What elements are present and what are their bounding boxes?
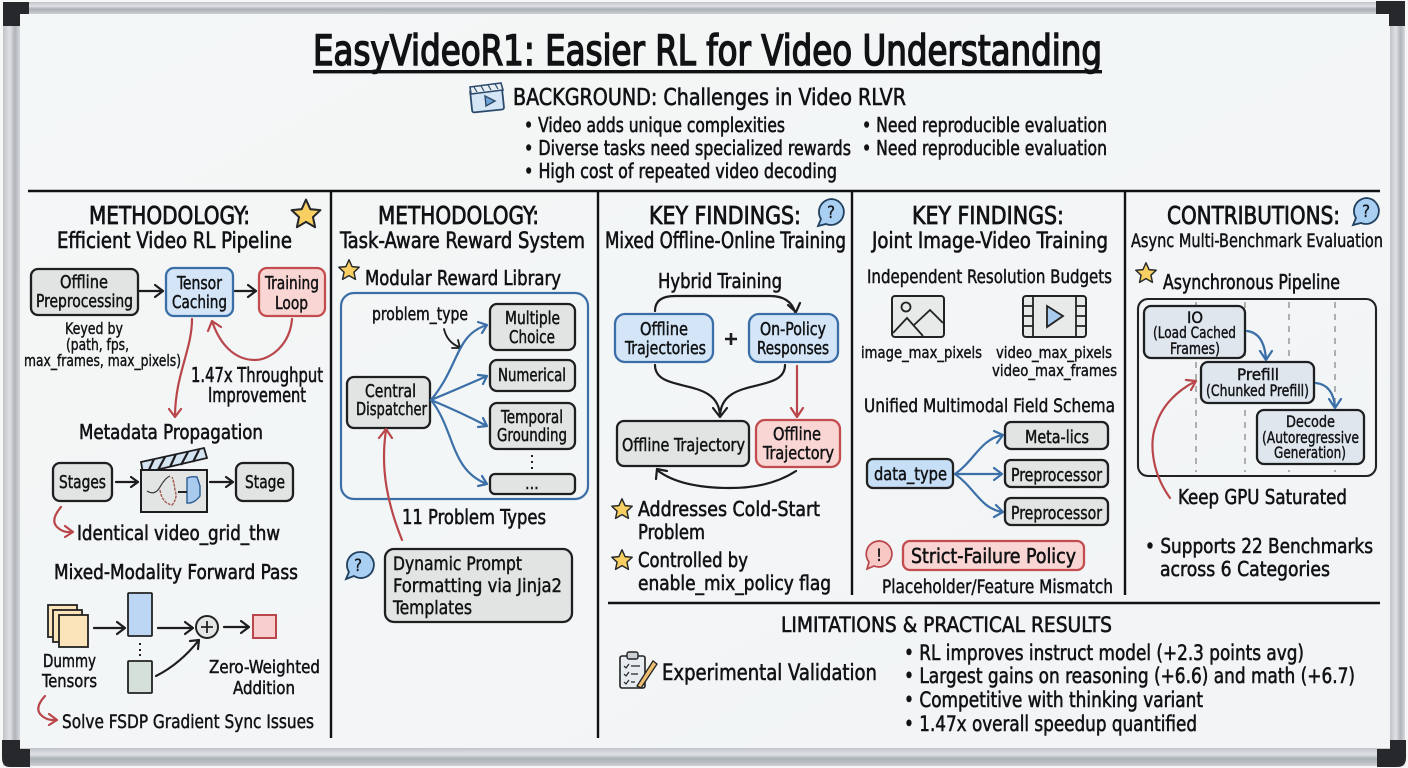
arrow: caching to loop — [235, 285, 256, 297]
numerical box — [490, 360, 575, 391]
arrow: return — [656, 469, 796, 488]
caching key note: (path, fps, — [66, 335, 129, 354]
training loop box — [259, 268, 325, 316]
arrow: red down — [791, 366, 803, 417]
arrow: caching to metadata — [169, 319, 192, 417]
arrow: prefill to decode — [1316, 383, 1341, 408]
hybrid training label: Hybrid Training — [658, 269, 782, 293]
panel: mixed offline-online training — [605, 199, 846, 595]
preprocessor box — [1005, 460, 1108, 487]
on-policy responses box: On-Policy — [760, 320, 826, 340]
heading: KEY FINDINGS: — [649, 201, 801, 230]
video budget label: video_max_frames — [992, 361, 1117, 381]
IO box: Frames) — [1170, 339, 1220, 358]
dispatcher box — [347, 377, 430, 428]
heading: KEY FINDINGS: — [912, 201, 1064, 230]
dummy tensors label: Dummy — [43, 652, 96, 672]
training loop box: Loop — [275, 294, 308, 314]
tensor caching box: Tensor — [176, 274, 222, 294]
icon: question bubble: ? — [1362, 202, 1370, 222]
stage box — [236, 463, 293, 501]
offline trajectory grey box — [617, 421, 749, 466]
icon: image — [892, 296, 944, 337]
validation label: Experimental Validation — [662, 661, 877, 686]
background bullets: • Need reproducible evaluation — [862, 113, 1107, 137]
arrow: hook — [54, 507, 73, 537]
panel: methodology pipeline — [24, 200, 325, 733]
temporal grounding box — [490, 403, 575, 449]
benchmark bullets: • Supports 22 Benchmarks — [1145, 534, 1373, 558]
prefill box: (Chunked Prefill) — [1206, 381, 1309, 400]
icon: addition node — [196, 616, 218, 638]
saturated label: Keep GPU Saturated — [1178, 485, 1347, 509]
heading: CONTRIBUTIONS: — [1167, 201, 1340, 230]
panel: async evaluation — [1131, 198, 1383, 581]
arrow: problem type — [444, 329, 460, 348]
caching key note — [24, 319, 181, 371]
panel: background — [470, 83, 1107, 183]
icon: question bubble: ? — [354, 556, 362, 576]
IO box: IO — [1187, 308, 1203, 327]
meta-lics box — [1005, 422, 1108, 449]
decode box: Generation) — [1274, 443, 1346, 462]
prompt formatting box — [385, 549, 572, 622]
zero weighted label: Addition — [233, 679, 295, 699]
identical grid note: Identical video_grid_thw — [77, 521, 280, 545]
subheading: Joint Image-Video Training — [870, 229, 1108, 254]
data type box — [867, 459, 953, 488]
pipeline heading: Asynchronous Pipeline — [1163, 270, 1340, 294]
background bullets — [524, 113, 1107, 183]
dispatcher box: Dispatcher — [356, 400, 427, 420]
library heading: Modular Reward Library — [365, 266, 561, 290]
preprocessor box: Preprocessor — [1011, 466, 1102, 486]
arrow: tensors to blocks — [94, 622, 125, 634]
decode box — [1257, 410, 1364, 464]
IO box: (Load Cached — [1153, 323, 1236, 342]
stages box: Stages — [59, 473, 106, 493]
icon: video film — [1023, 296, 1086, 337]
more box: ... — [525, 474, 539, 493]
panel: task-aware reward system — [339, 201, 588, 622]
multiple choice box: Choice — [509, 328, 555, 348]
image budget label: image_max_pixels — [861, 343, 982, 363]
multiple choice box — [490, 304, 575, 350]
results bullets — [904, 641, 1355, 736]
heading: METHODOLOGY: — [89, 201, 250, 230]
flag note — [638, 548, 831, 595]
dots — [139, 643, 141, 656]
arrow: clapper to stage — [210, 477, 233, 487]
results bullets: • Largest gains on reasoning (+6.6) and math (+6.7) — [904, 664, 1355, 688]
results bullets: • RL improves instruct model (+2.3 points avg) — [904, 641, 1304, 665]
background bullets: • Diverse tasks need specialized rewards — [524, 136, 851, 160]
output square — [253, 615, 276, 638]
library frame — [341, 293, 588, 499]
blue block — [128, 593, 152, 636]
temporal grounding box: Temporal — [500, 408, 563, 428]
numerical box: Numerical — [498, 366, 566, 386]
on-policy responses box: Responses — [757, 339, 829, 359]
offline preprocessing box: Offline — [60, 273, 108, 293]
results bullets: • Competitive with thinking variant — [904, 688, 1203, 712]
arrow: loop back to caching — [208, 319, 292, 360]
prefill box: Prefill — [1237, 365, 1279, 384]
cold-start note: Problem — [638, 520, 705, 544]
forward pass heading: Mixed-Modality Forward Pass — [54, 560, 298, 584]
flag note: enable_mix_policy flag — [638, 571, 831, 595]
throughput note: Improvement — [208, 383, 306, 407]
offline trajectory red box — [756, 420, 840, 467]
tensor caching box — [166, 268, 233, 316]
grey block — [128, 661, 152, 693]
icon: video clip — [470, 83, 504, 113]
subheading: Task-Aware Reward System — [339, 229, 585, 254]
prompt formatting box: Templates — [392, 597, 472, 619]
offline trajectories box: Offline — [640, 320, 688, 340]
mismatch note: Placeholder/Feature Mismatch — [882, 577, 1113, 598]
subheading: Efficient Video RL Pipeline — [57, 229, 292, 254]
icon: clipboard — [620, 652, 657, 688]
stages box — [53, 463, 112, 501]
panel: joint image-video training — [861, 201, 1117, 598]
plus sign — [725, 333, 737, 345]
icon: star — [612, 550, 632, 569]
icon: dummy tensor stack — [48, 605, 88, 647]
video budget label — [992, 343, 1117, 381]
meta-lics box: Meta-lics — [1025, 428, 1089, 448]
icon: clapperboard — [141, 448, 207, 512]
decode box: Decode — [1286, 412, 1335, 431]
preprocessor box — [1005, 498, 1108, 525]
cold-start note — [638, 497, 820, 544]
icon: alert bubble: ! — [876, 546, 882, 566]
arrow: hook — [38, 696, 57, 725]
icon: star — [339, 260, 359, 279]
icon: question bubble — [346, 552, 374, 579]
zero weighted label — [209, 658, 320, 699]
arrow: merge — [655, 365, 785, 417]
benchmark bullets — [1145, 534, 1373, 581]
gradient sync note: Solve FSDP Gradient Sync Issues — [62, 711, 314, 733]
schema heading: Unified Multimodal Field Schema — [864, 395, 1115, 417]
offline preprocessing box — [31, 269, 138, 315]
icon: star — [1136, 263, 1156, 282]
decode box: (Autoregressive — [1262, 428, 1359, 447]
zero weighted label: Zero-Weighted — [209, 658, 320, 678]
more box — [490, 474, 575, 494]
temporal grounding box: Grounding — [497, 426, 567, 446]
caching key note: max_frames, max_pixels) — [24, 351, 181, 371]
metadata heading: Metadata Propagation — [79, 420, 263, 444]
prompt formatting box: Formatting via Jinja2 — [393, 575, 562, 597]
video budget label: video_max_pixels — [996, 343, 1112, 363]
background bullets: • Video adds unique complexities — [524, 113, 785, 137]
tensor caching box: Caching — [172, 293, 227, 313]
on-policy responses box — [749, 314, 838, 362]
icon: question bubble — [818, 199, 844, 226]
background bullets: • High cost of repeated video decoding — [524, 159, 837, 183]
title: EasyVideoR1: Easier RL for Video Understanding — [313, 26, 1102, 75]
stage box: Stage — [245, 473, 285, 493]
background heading: BACKGROUND: Challenges in Video RLVR — [513, 85, 906, 111]
dummy tensors label: Tensors — [41, 672, 97, 692]
throughput note — [191, 363, 323, 407]
arrow: sum to output — [224, 621, 249, 633]
caching key note: Keyed by — [65, 319, 123, 338]
panel: limitations and results — [620, 613, 1355, 736]
dispatcher box: Central — [365, 382, 416, 402]
offline trajectory red box: Trajectory — [762, 444, 834, 464]
dummy tensors label — [41, 652, 97, 692]
benchmark bullets: across 6 Categories — [1160, 557, 1330, 581]
offline preprocessing box: Preprocessing — [36, 292, 133, 312]
arrow: over top — [655, 296, 800, 312]
heading: METHODOLOGY: — [378, 201, 539, 230]
training loop box: Training — [264, 274, 319, 294]
throughput note: 1.47x Throughput — [191, 363, 323, 387]
offline trajectory grey box: Offline Trajectory — [622, 436, 745, 456]
dots — [531, 455, 533, 469]
problem types label: 11 Problem Types — [402, 505, 546, 529]
strict failure box: Strict-Failure Policy — [911, 544, 1076, 568]
problem type label: problem_type — [372, 305, 468, 325]
flag note: Controlled by — [638, 548, 748, 572]
icon: alert bubble — [866, 541, 892, 569]
background bullets: • Need reproducible evaluation — [862, 136, 1107, 160]
offline trajectories box — [615, 314, 713, 362]
arrow: templates to dispatcher — [379, 429, 402, 540]
subheading: Mixed Offline-Online Training — [605, 229, 846, 254]
cold-start note: Addresses Cold-Start — [638, 497, 820, 521]
offline trajectory red box: Offline — [773, 425, 821, 445]
results bullets: • 1.47x overall speedup quantified — [904, 712, 1197, 736]
arrow: block to sum — [158, 622, 193, 634]
pipeline frame — [1138, 299, 1376, 476]
prompt formatting box: Dynamic Prompt — [393, 553, 522, 575]
data type box: data_type — [874, 465, 947, 485]
prefill box — [1201, 362, 1314, 403]
IO box — [1144, 306, 1245, 358]
arrows: dispatcher to problem types — [431, 322, 487, 486]
preprocessor box: Preprocessor — [1011, 504, 1102, 524]
arrow: preprocess to caching — [139, 285, 163, 297]
arrow: keep saturated — [1153, 380, 1196, 498]
heading: LIMITATIONS & PRACTICAL RESULTS — [781, 613, 1112, 637]
icon: question bubble: ? — [827, 203, 835, 223]
arrow: grey block to sum — [156, 640, 199, 676]
budgets heading: Independent Resolution Budgets — [867, 266, 1112, 288]
icon: star — [612, 499, 632, 518]
offline trajectories box: Trajectories — [624, 339, 706, 359]
arrow: stages to clapper — [116, 477, 138, 487]
arrows: data type fan-out — [955, 431, 1003, 517]
icon: star — [292, 200, 320, 227]
multiple choice box: Multiple — [505, 309, 560, 329]
icon: question bubble — [1353, 198, 1379, 225]
arrow: IO to prefill — [1247, 331, 1272, 360]
